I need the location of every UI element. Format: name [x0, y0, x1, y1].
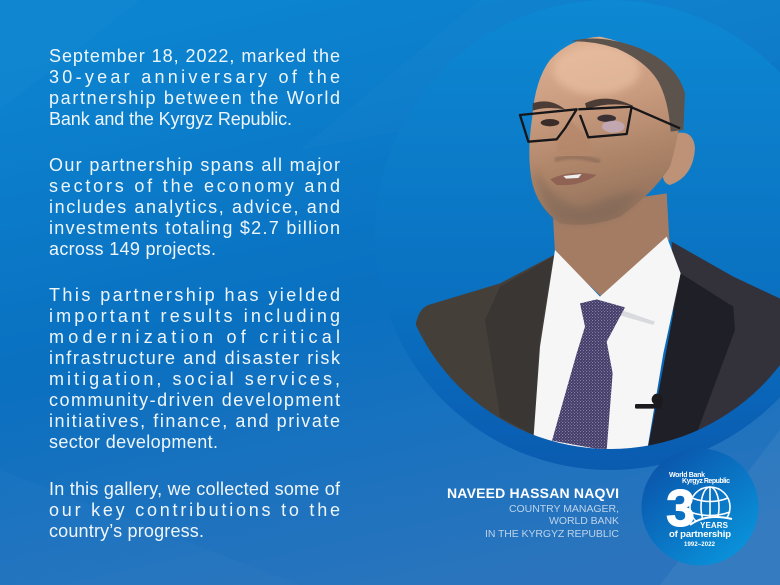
forehead highlight [553, 45, 640, 95]
paragraph 2 [49, 155, 340, 259]
glasses [520, 107, 680, 142]
jacket left [416, 255, 554, 436]
left lapel [485, 257, 553, 435]
head [529, 37, 682, 225]
paragraph 3: mitigation, social services, [49, 369, 340, 389]
jacket right [647, 242, 780, 453]
numeral 3: 3 [666, 480, 695, 538]
eyebrows [533, 99, 633, 111]
speaker name and title: COUNTRY MANAGER, [509, 503, 619, 515]
paragraph 1: Bank and the Kyrgyz Republic. [49, 109, 292, 129]
tie [552, 299, 625, 451]
paragraph 3: important results including [49, 306, 340, 326]
eyes [541, 115, 625, 133]
paragraph 1: 30-year anniversary of the [49, 67, 340, 87]
logo badge: 30 years of partnership [642, 448, 758, 566]
paragraph 4: country’s progress. [49, 521, 204, 541]
paragraph 2: investments totaling $2.7 billion [49, 218, 340, 238]
paragraph 3: community-driven development [49, 390, 340, 410]
globe icon [690, 487, 732, 527]
nose and mouth [550, 120, 600, 185]
paragraph 4 [49, 479, 341, 541]
paragraph 3: sector development. [49, 432, 218, 452]
speaker name and title: IN THE KYRGYZ REPUBLIC [485, 528, 619, 540]
speaker name and title [447, 485, 619, 540]
logo badge: 30 years of partnership: Kyrgyz Republic [682, 478, 730, 485]
paragraph 3: This partnership has yielded [49, 285, 340, 305]
speaker name and title: NAVEED HASSAN NAQVI [447, 485, 619, 501]
paragraph 3: infrastructure and disaster risk [49, 348, 341, 368]
lower face shadow [533, 167, 643, 223]
collar shadow line [620, 310, 655, 325]
hair [570, 39, 685, 132]
shirt [533, 237, 681, 453]
jacket lapel right [648, 273, 735, 447]
paragraph 4: our key contributions to the [49, 500, 340, 520]
paragraph 2: Our partnership spans all major [49, 155, 340, 175]
portrait of speaker [400, 37, 780, 453]
microphone [635, 394, 663, 409]
paragraph 2: sectors of the economy and [49, 176, 340, 196]
paragraph 1: partnership between the World [49, 88, 340, 108]
logo badge: 30 years of partnership: World Bank [669, 472, 705, 479]
paragraph 3 [49, 285, 341, 452]
paragraph 3: modernization of critical [49, 327, 340, 347]
paragraph 2: includes analytics, advice, and [49, 197, 340, 217]
logo badge: 30 years of partnership: of partnership [669, 529, 731, 540]
ear [662, 133, 695, 185]
neck [553, 193, 669, 298]
large circle behind portrait [375, 0, 780, 470]
paragraph 2: across 149 projects. [49, 239, 216, 259]
paragraph 3: initiatives, finance, and private [49, 411, 340, 431]
paragraph 1: September 18, 2022, marked the [49, 46, 340, 66]
speaker name and title: WORLD BANK [549, 515, 619, 527]
logo badge: 30 years of partnership: 1992–2022 [684, 542, 716, 548]
logo badge: 30 years of partnership: YEARS [700, 521, 729, 530]
paragraph 1 [49, 46, 340, 129]
paragraph 4: In this gallery, we collected some of [49, 479, 341, 499]
